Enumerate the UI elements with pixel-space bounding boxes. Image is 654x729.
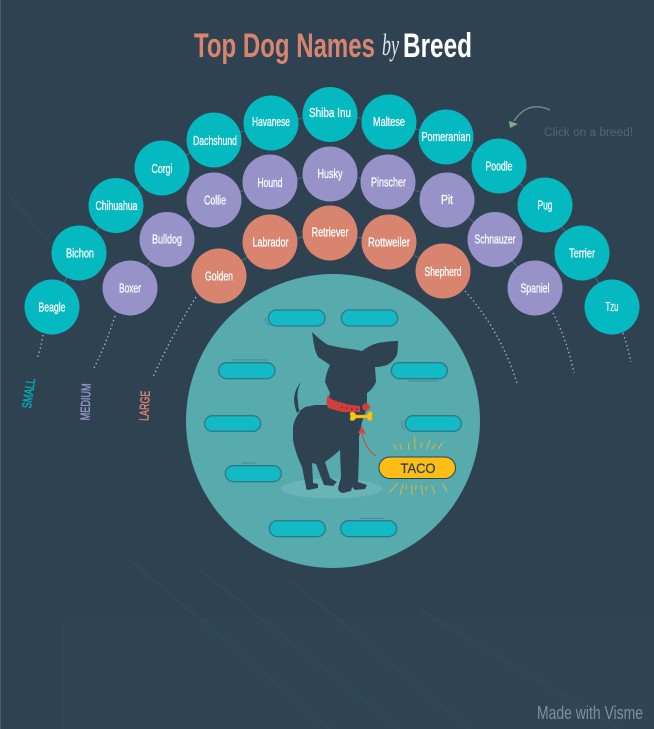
Shepherd: Shepherd bbox=[424, 264, 462, 279]
Shiba Inu: Shiba Inu bbox=[309, 105, 351, 120]
title: by bbox=[382, 27, 399, 62]
Schnauzer bbox=[468, 212, 522, 267]
size label: large: LARGE bbox=[136, 390, 153, 421]
Spaniel bbox=[508, 260, 562, 316]
name slots bbox=[205, 310, 461, 537]
Golden: Golden bbox=[205, 268, 233, 284]
Corgi bbox=[134, 140, 190, 196]
Beagle bbox=[24, 280, 80, 334]
Labrador: Labrador bbox=[252, 234, 289, 250]
Maltese: Maltese bbox=[373, 114, 405, 129]
size label: medium: MEDIUM bbox=[77, 383, 94, 421]
size label: small: SMALL bbox=[19, 377, 38, 409]
hint text: Click on a breed! bbox=[544, 127, 633, 139]
Boxer bbox=[102, 260, 158, 316]
Pit bbox=[420, 172, 474, 228]
Bulldog: Bulldog bbox=[152, 232, 182, 246]
Chihuahua: Chihuahua bbox=[96, 198, 138, 213]
collar bbox=[326, 395, 370, 412]
Bulldog bbox=[140, 212, 194, 267]
Pug: Pug bbox=[538, 198, 552, 212]
Pinscher bbox=[360, 154, 416, 210]
name badge: Taco bbox=[379, 457, 456, 478]
Pomeranian: Pomeranian bbox=[422, 129, 470, 144]
dotted size guide lines bbox=[37, 291, 631, 383]
breed circles: large bbox=[192, 206, 470, 304]
bone tag bbox=[350, 411, 372, 421]
name badge: Taco: TACO bbox=[400, 460, 436, 476]
Poodle: Poodle bbox=[486, 158, 512, 174]
Labrador bbox=[242, 214, 298, 270]
Hound bbox=[242, 154, 298, 210]
Bichon: Bichon bbox=[66, 246, 94, 260]
breed circles: small bbox=[24, 87, 640, 334]
Poodle bbox=[472, 138, 526, 194]
Maltese bbox=[362, 94, 416, 150]
dog silhouette bbox=[293, 332, 398, 493]
Schnauzer: Schnauzer bbox=[474, 232, 516, 246]
central panel: dog names circle bbox=[186, 274, 480, 568]
connectors between breed circles bbox=[52, 114, 612, 307]
title: Breed bbox=[403, 27, 472, 65]
Terrier bbox=[554, 226, 610, 280]
Husky: Husky bbox=[318, 166, 343, 181]
sparkle rays bbox=[389, 437, 447, 495]
breed circles: medium bbox=[102, 146, 562, 316]
Beagle: Beagle bbox=[38, 300, 66, 314]
Shepherd bbox=[416, 244, 470, 298]
Husky bbox=[302, 146, 358, 202]
Bichon bbox=[52, 226, 106, 280]
Retriever bbox=[302, 206, 358, 260]
title: Top Dog Names bbox=[194, 27, 375, 65]
Spaniel: Spaniel bbox=[520, 280, 550, 296]
Shiba Inu bbox=[302, 87, 358, 142]
ground shadow bbox=[281, 478, 382, 498]
Tzu bbox=[584, 280, 640, 334]
Dachshund: Dachshund bbox=[193, 133, 237, 148]
Pinscher: Pinscher bbox=[371, 174, 406, 190]
Chihuahua bbox=[88, 178, 144, 233]
Terrier: Terrier bbox=[569, 246, 595, 260]
Pit: Pit bbox=[441, 192, 453, 207]
Rottweiler: Rottweiler bbox=[368, 234, 410, 250]
Hound: Hound bbox=[258, 175, 282, 190]
Havanese: Havanese bbox=[252, 114, 290, 129]
Corgi: Corgi bbox=[152, 161, 173, 176]
arrow to tag bbox=[358, 426, 376, 456]
Dachshund bbox=[186, 112, 242, 168]
Retriever: Retriever bbox=[312, 224, 349, 240]
Boxer: Boxer bbox=[119, 280, 141, 296]
Golden bbox=[192, 248, 246, 304]
Havanese bbox=[244, 96, 298, 150]
Pug bbox=[518, 178, 572, 232]
Collie bbox=[186, 172, 242, 228]
Pomeranian bbox=[418, 110, 474, 164]
Rottweiler bbox=[362, 214, 416, 270]
click hint bbox=[509, 107, 633, 139]
Tzu: Tzu bbox=[606, 299, 618, 314]
arrow: points to breeds bbox=[509, 107, 550, 128]
Collie: Collie bbox=[204, 192, 226, 208]
